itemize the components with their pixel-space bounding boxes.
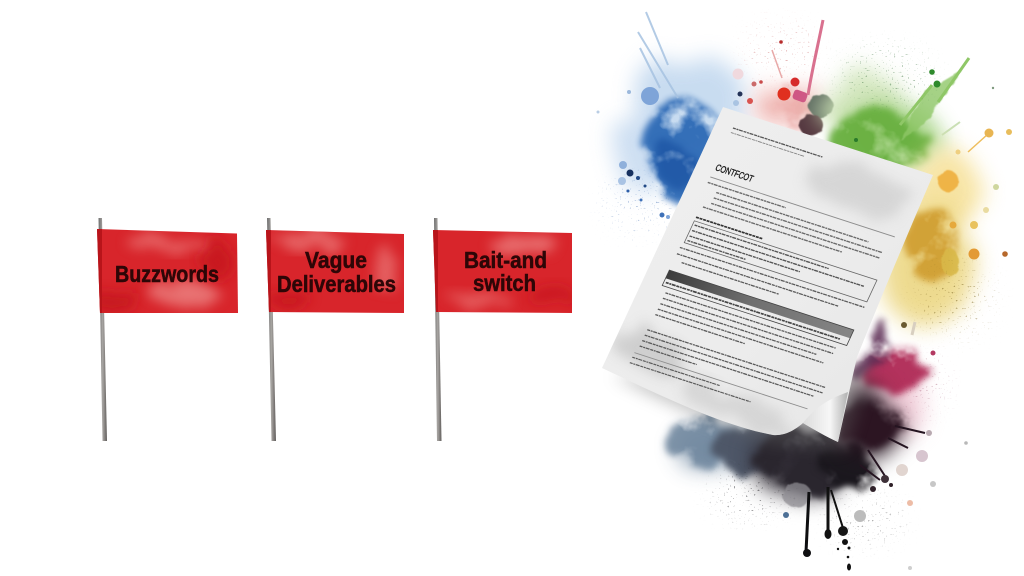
contract page content	[625, 128, 919, 422]
red flag: Vague Deliverables: Deliverables	[277, 271, 396, 297]
flag cloth	[266, 230, 404, 313]
flag pole	[434, 218, 442, 441]
boxed table	[674, 217, 879, 320]
dark table header	[666, 270, 854, 338]
first text block	[697, 182, 888, 263]
black and slate splash	[667, 393, 968, 570]
watercolor splash	[596, 12, 1012, 570]
red flag: Vague Deliverables	[264, 218, 407, 441]
flag label: Bait-and	[464, 247, 547, 273]
magenta splash	[848, 322, 947, 431]
title rule	[710, 177, 895, 237]
yellow splash	[881, 128, 1012, 335]
flag label: Vague	[305, 247, 367, 273]
flag label: Buzzwords	[115, 261, 219, 287]
paper curl	[803, 392, 848, 442]
red flag: Bait-and switch: switch	[473, 270, 536, 296]
footer rule and text	[630, 353, 807, 419]
closing text block	[640, 330, 825, 404]
red flag: Bait-and switch	[431, 218, 575, 441]
page header text	[731, 128, 822, 162]
paper sheet	[602, 107, 933, 442]
paper shading	[603, 151, 924, 439]
green splash	[824, 47, 994, 170]
red flag: Buzzwords	[90, 218, 241, 441]
contract title: CONTFCOT	[713, 163, 755, 185]
red and pink splash	[732, 20, 833, 136]
contract document	[602, 107, 933, 450]
paper shadow	[612, 365, 870, 450]
flag pole	[267, 218, 276, 441]
table rows	[650, 270, 854, 373]
flag cloth	[431, 227, 575, 316]
flag cloth	[97, 229, 238, 313]
blue splash	[596, 12, 745, 231]
flag pole	[98, 218, 107, 441]
